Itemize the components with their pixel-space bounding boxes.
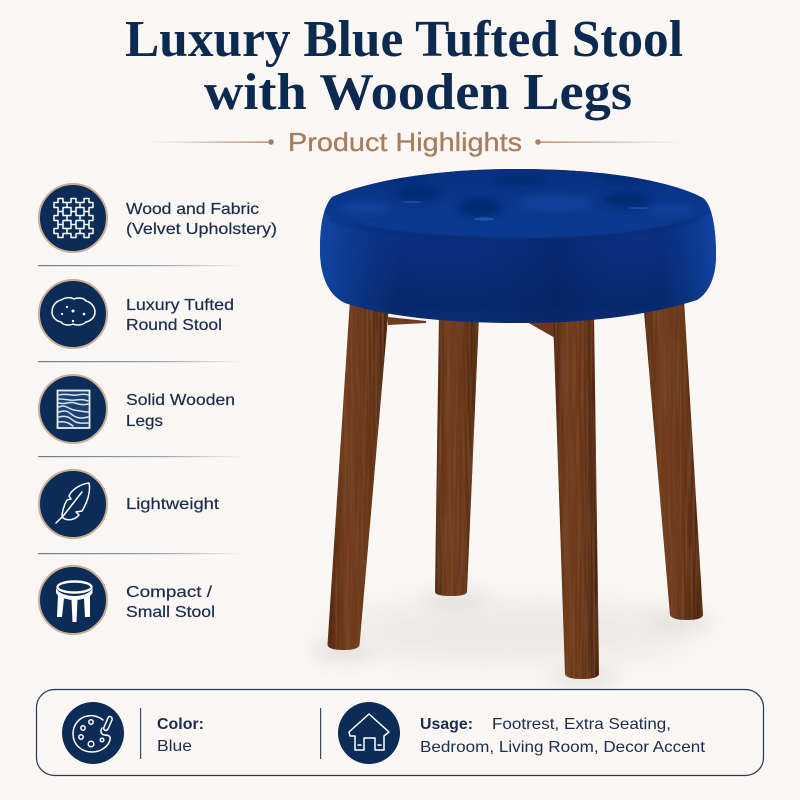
text: usage: Bedroom, Living Room, Decor Accent	[420, 739, 706, 756]
text: usage	[420, 716, 706, 756]
label: Luxury Tufted	[126, 297, 234, 314]
text: color	[157, 716, 204, 755]
icon: stool	[39, 566, 107, 634]
label: Round Stool	[126, 317, 222, 334]
feature: lightweight	[39, 470, 220, 538]
title	[125, 11, 683, 121]
label: Compact /	[126, 584, 213, 601]
subheading: product highlights	[150, 127, 681, 157]
label: (Velvet Upholstery)	[126, 221, 277, 238]
feature: solid wooden legs	[39, 375, 235, 443]
feature: wood and fabric	[39, 184, 277, 252]
icon: palette	[62, 702, 124, 764]
label: Lightweight	[126, 496, 220, 513]
subheading: product highlights: Product Highlights	[288, 127, 522, 157]
text: color: Color:	[157, 716, 204, 733]
product image: stool	[310, 169, 716, 683]
title: with Wooden Legs	[204, 64, 632, 121]
title: Luxury Blue Tufted Stool	[125, 11, 683, 68]
floor shadow	[310, 594, 714, 683]
icon: wood grain	[39, 375, 107, 443]
seam shadow	[330, 218, 702, 239]
label	[126, 584, 215, 621]
icon: house	[338, 702, 400, 764]
legs	[328, 300, 703, 679]
panel: color and usage	[36, 690, 764, 776]
panel: feature list	[38, 184, 277, 634]
icon: cushion	[39, 280, 107, 348]
label: Solid Wooden	[126, 392, 235, 409]
label	[126, 297, 234, 334]
text: usage: Footrest, Extra Seating,	[492, 716, 671, 733]
seat cushion	[320, 169, 716, 323]
label: Legs	[126, 413, 163, 430]
text: usage: Usage:	[420, 716, 473, 733]
label	[126, 201, 277, 238]
label	[126, 392, 235, 430]
icon: feather	[39, 470, 107, 538]
feature: tufted round	[39, 280, 234, 348]
label: Wood and Fabric	[126, 201, 259, 218]
feature: compact stool	[39, 566, 215, 634]
icon: woven fabric	[39, 184, 107, 252]
label: Small Stool	[126, 604, 215, 621]
tufted top	[320, 169, 716, 238]
text: color: Blue	[157, 738, 192, 755]
